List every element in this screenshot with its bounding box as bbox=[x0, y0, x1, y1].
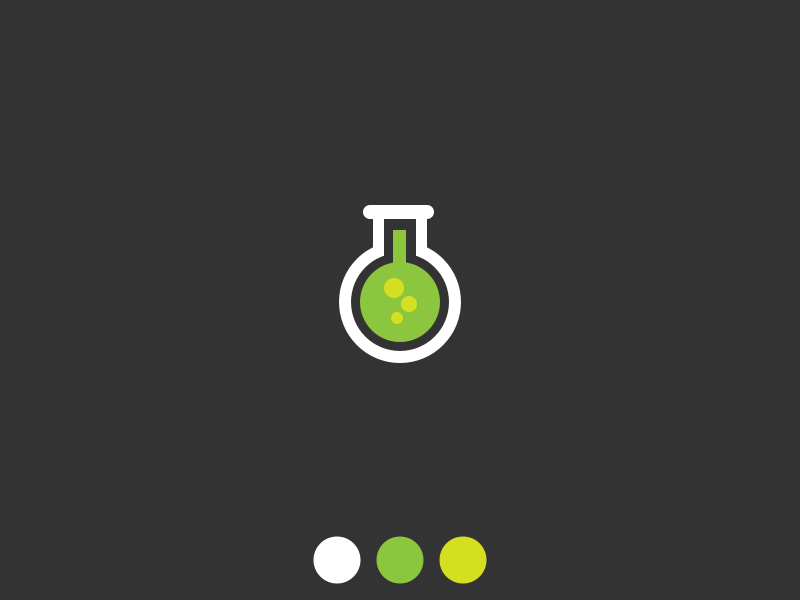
flask outer white bbox=[339, 205, 461, 363]
liquid bbox=[360, 230, 440, 342]
colour swatches bbox=[314, 536, 486, 584]
flask inner dark bbox=[351, 219, 449, 351]
icon: flask bbox=[339, 205, 461, 363]
bubbles bbox=[384, 278, 417, 324]
